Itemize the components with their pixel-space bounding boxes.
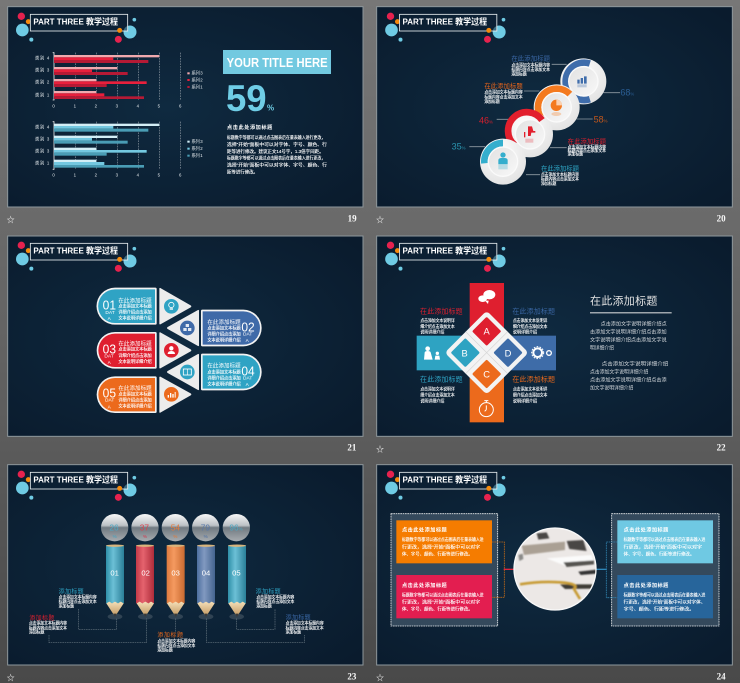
heading and underline bbox=[590, 294, 672, 313]
label red bbox=[568, 136, 607, 158]
label right blue: 添加标题 bbox=[286, 629, 302, 636]
slide 20 background bbox=[377, 7, 732, 207]
label orange: 在此添加标题 bbox=[484, 81, 523, 90]
label left cyan bbox=[59, 588, 97, 609]
label orange: 点击添加文本说明详 bbox=[513, 386, 548, 393]
body text: 明详细介绍 bbox=[590, 343, 614, 351]
label right cyan: 添加标题 bbox=[256, 588, 281, 596]
circle: 58% bbox=[534, 84, 580, 130]
pencil 04: 04 bbox=[202, 569, 211, 578]
header badge: PART THREE 教学过程 bbox=[402, 474, 487, 485]
pill 02: 详细介绍点击添加 bbox=[207, 330, 241, 337]
box: orange: 行更改，选择“开始”面板中可以对字 bbox=[402, 543, 481, 550]
label blue: 添加标题 bbox=[511, 71, 527, 78]
triangle icon 1 bbox=[159, 288, 191, 324]
slide 23: pencils bbox=[7, 465, 363, 683]
connector lines bbox=[469, 64, 620, 175]
triangle icon 2 bbox=[167, 310, 199, 346]
pill 04: 04 bbox=[241, 364, 255, 378]
box: orange: 标题数字等都可以通过点击图表后在量表输入进 bbox=[402, 536, 484, 543]
cross bars bbox=[417, 283, 556, 422]
label red bbox=[420, 306, 463, 336]
pill 03: 详细介绍点击添加 bbox=[118, 352, 152, 359]
box: light blue: 标题数字等都可以通过点击图表后在量表输入进 bbox=[624, 536, 706, 543]
label right blue: 添加标题 bbox=[286, 614, 311, 622]
pill 05: DAT bbox=[105, 398, 114, 404]
blue bar chart: 系列 2 bbox=[191, 145, 203, 152]
blue bar chart bbox=[35, 122, 203, 178]
label cyan: 在此添加标题 bbox=[541, 163, 580, 172]
pill 05: A bbox=[108, 404, 112, 409]
box: light blue: 体、字号、颜色、行距等进行修改。 bbox=[624, 550, 694, 557]
red bar chart: 系列 1 bbox=[191, 83, 203, 90]
pill 02: DAT bbox=[243, 332, 252, 338]
icon: gears bbox=[532, 347, 551, 359]
label orange: 点击添加文本标题内容 bbox=[484, 89, 523, 96]
triangle icon 5 bbox=[159, 377, 191, 413]
pill 03: 在此添加标题 bbox=[118, 340, 152, 348]
pill 01: DAT bbox=[105, 310, 115, 316]
header badge bbox=[16, 242, 136, 272]
pill 02: 02 bbox=[241, 321, 255, 335]
box: crimson bbox=[396, 575, 492, 618]
label blue bbox=[512, 306, 555, 336]
label cyan bbox=[420, 375, 463, 405]
pill 05: 文本说明详细介绍 bbox=[118, 403, 152, 410]
label orange bbox=[484, 81, 523, 105]
header badge bbox=[385, 13, 506, 43]
favorite star: ☆ bbox=[376, 674, 384, 683]
label center orange: 点击添加文本标题内容 bbox=[157, 637, 196, 644]
pill 05: 05 bbox=[103, 386, 116, 400]
label red: 在此添加标题 bbox=[568, 136, 607, 145]
pill 05: 点击添加文本标题 bbox=[118, 391, 152, 398]
body text: 点击添加文字说明详细介绍点击添 bbox=[590, 376, 667, 384]
body text bbox=[590, 320, 668, 392]
red bar chart: 6 bbox=[179, 104, 182, 109]
blue bar chart: 2 bbox=[95, 173, 98, 178]
favorite star: ☆ bbox=[376, 445, 384, 454]
label cyan: 细介绍点击添加文本 bbox=[420, 392, 455, 399]
pencil 04: % bbox=[204, 534, 208, 539]
blue bar chart: 3 bbox=[116, 173, 119, 178]
label red: 细介绍点击添加文本 bbox=[420, 323, 455, 330]
box: dark blue: 字号、颜色、行距等进行修改。 bbox=[624, 606, 694, 613]
box: crimson: 点击此处添加标题 bbox=[402, 581, 447, 589]
label orange: 在此添加标题 bbox=[512, 375, 555, 384]
label blue: 点击添加文本说明详 bbox=[513, 317, 548, 324]
text block: 选择“开始”面板中可以对字体、字号、颜色、行 bbox=[227, 141, 328, 148]
icon: chat bubbles bbox=[478, 290, 495, 304]
pill 01: A bbox=[108, 316, 112, 321]
pencil 02: 02 bbox=[141, 569, 150, 578]
label blue: 在此添加标题 bbox=[512, 306, 555, 315]
heading and underline: 在此添加标题 bbox=[590, 294, 657, 308]
box: light blue: 点击此处添加标题 bbox=[624, 525, 669, 533]
label cyan: 在此添加标题 bbox=[420, 375, 463, 384]
slide 19: bar charts and 59% bbox=[7, 7, 363, 225]
slide 22: cross diagram bbox=[376, 236, 732, 454]
label blue: 标题内容点击添加文本 bbox=[511, 66, 551, 73]
header badge: PART THREE 教学过程 bbox=[402, 245, 487, 256]
label red: 点击添加文本标题内容 bbox=[568, 143, 607, 150]
label right cyan: 标题内容点击添加文本 bbox=[256, 598, 295, 605]
connectors right bbox=[606, 542, 617, 598]
label blue bbox=[511, 54, 551, 78]
pill 01: 01 bbox=[103, 299, 116, 313]
circular photo bbox=[513, 527, 597, 612]
red bar chart: 类别 2 bbox=[35, 79, 50, 86]
box: orange: 体、字号、颜色、行距等进行修改。 bbox=[402, 550, 473, 557]
label red: 点击添加文本说明详 bbox=[420, 317, 455, 324]
page number: 22 bbox=[717, 443, 726, 453]
pill 03: DAT bbox=[104, 353, 114, 359]
pencil 02: 37 bbox=[140, 523, 149, 533]
slide 21: numbered pills bbox=[8, 236, 363, 453]
label cyan: 点击添加文本说明详 bbox=[420, 386, 455, 393]
right dashed panel bbox=[612, 514, 719, 626]
triangle icon 4 bbox=[167, 354, 199, 390]
pencil 03: % bbox=[173, 534, 177, 539]
label right cyan: 添加标题 bbox=[256, 602, 272, 609]
pencil 01: 01 bbox=[110, 569, 119, 578]
title box: YOUR TITLE HERE bbox=[227, 55, 328, 70]
box: light blue bbox=[617, 520, 713, 563]
label red: 标题内容点击添加文本 bbox=[568, 147, 607, 154]
central diamonds: D bbox=[505, 349, 512, 359]
big percentage: % bbox=[267, 104, 274, 113]
label blue: 说明详细介绍 bbox=[513, 329, 537, 336]
pill 04: 文本说明详细介绍 bbox=[207, 380, 241, 387]
red bar chart: 类别 1 bbox=[35, 92, 50, 99]
page number: 24 bbox=[717, 671, 726, 681]
percent 68: 68% bbox=[620, 88, 634, 98]
pencil 02 bbox=[131, 514, 159, 620]
box: light blue: 行更改，选择“开始”面板中可以对字 bbox=[624, 543, 703, 550]
pencil 05: 05 bbox=[232, 569, 241, 578]
text block bbox=[227, 123, 328, 175]
left dashed panel bbox=[391, 514, 498, 626]
red bar chart: 4 bbox=[137, 104, 140, 109]
pill 05: 在此添加标题 bbox=[118, 384, 152, 392]
red bar chart: 1 bbox=[74, 104, 77, 109]
pill 03: 点击添加文本标题 bbox=[118, 346, 152, 353]
page number: 20 bbox=[717, 213, 726, 223]
page number: 23 bbox=[347, 671, 357, 681]
label orange: 添加标题 bbox=[484, 98, 500, 105]
label orange bbox=[512, 375, 555, 405]
circle: 68% bbox=[560, 58, 606, 104]
text block: 距等进行修改。 bbox=[227, 168, 258, 175]
pencil 03: 03 bbox=[171, 569, 180, 578]
pill 03 bbox=[97, 332, 157, 369]
slide 20: progress circles bbox=[376, 7, 732, 225]
pill 04: 在此添加标题 bbox=[207, 362, 241, 370]
icon: people bbox=[424, 346, 440, 360]
slide 24 background bbox=[377, 465, 732, 665]
icon: stopwatch bbox=[479, 401, 493, 417]
pencil 04 bbox=[192, 514, 219, 620]
red bar chart: 系列 3 bbox=[191, 70, 203, 77]
favorite star: ☆ bbox=[7, 216, 15, 225]
header badge bbox=[385, 471, 506, 501]
label cyan: 说明详细介绍 bbox=[420, 398, 444, 405]
pill 02 bbox=[201, 310, 262, 346]
red bar chart: 2 bbox=[95, 104, 98, 109]
label center orange bbox=[157, 631, 196, 653]
label cyan: 添加标题 bbox=[541, 180, 557, 187]
page number: 19 bbox=[348, 213, 357, 223]
pencil 05 bbox=[223, 514, 250, 620]
connectors left bbox=[492, 542, 504, 597]
label center orange: 添加标题 bbox=[157, 646, 173, 653]
body text: 点击添加文字说明详细介绍 bbox=[590, 368, 648, 376]
blue bar chart: 系列 1 bbox=[191, 152, 203, 159]
label red: 添加标题 bbox=[568, 151, 584, 158]
label left red: 添加标题 bbox=[29, 629, 45, 636]
pencil 05: 96% bbox=[229, 523, 243, 533]
box: dark blue: 标题数字等都可以通过点击图表后在量表输入进 bbox=[624, 591, 706, 598]
big percentage: 59 bbox=[226, 77, 267, 119]
box: dark blue: 行更改，选择“开始”面板中可以对字体、 bbox=[624, 599, 705, 606]
text block: 标题数字等都可以通过点击图表后在量表输入进行更改， bbox=[227, 134, 325, 141]
label cyan: 点击添加文本标题内容 bbox=[541, 171, 580, 178]
blue bar chart: 类别 1 bbox=[35, 159, 50, 166]
pill 01: 文本说明详细介绍 bbox=[118, 314, 152, 321]
blue bar chart: 系列 3 bbox=[191, 138, 203, 145]
central diamonds: A bbox=[484, 326, 491, 336]
label right cyan: 点击添加文本标题内容 bbox=[256, 593, 295, 600]
label red: 说明详细介绍 bbox=[420, 329, 444, 336]
label center orange: 标题内容点击添加文本 bbox=[157, 642, 196, 649]
text block: 点击此处添加标题 bbox=[227, 123, 273, 131]
circle: 35% bbox=[480, 139, 526, 185]
label right blue bbox=[286, 614, 324, 636]
label left red: 标题内容点击添加文本 bbox=[29, 624, 68, 631]
pencil 04: 79 bbox=[201, 523, 210, 533]
percent 35: 35% bbox=[452, 142, 466, 152]
label blue: 在此添加标题 bbox=[511, 54, 551, 63]
title box bbox=[223, 50, 331, 74]
red bar chart: 0 bbox=[52, 104, 55, 109]
body text: 击添加文字说明详细介绍点击添加 bbox=[590, 328, 667, 336]
central diamonds bbox=[445, 311, 529, 395]
label blue: 细介绍点击添加文本 bbox=[513, 323, 548, 330]
label orange: 标题内容点击添加文本 bbox=[484, 93, 523, 100]
text block: 选择“开始”面板中可以对字体、字号、颜色、行 bbox=[227, 162, 328, 169]
blue bar chart: 5 bbox=[158, 173, 161, 178]
blue bar chart: 6 bbox=[179, 173, 182, 178]
pill 03: 文本说明详细介绍 bbox=[118, 358, 152, 365]
text block: 标题数字等都可以通过点击图表后在量表输入进行更改， bbox=[227, 155, 325, 162]
pill 04: 点击添加文本标题 bbox=[207, 368, 241, 375]
slide 24: photo with four text boxes bbox=[376, 465, 732, 683]
pill 04: A bbox=[246, 382, 250, 387]
pencil 02: % bbox=[143, 534, 147, 539]
box: orange bbox=[396, 520, 492, 563]
label orange: 细介绍点击添加文本 bbox=[513, 392, 548, 399]
dashed connectors bbox=[49, 609, 304, 643]
label right blue: 点击添加文本标题内容 bbox=[286, 620, 324, 627]
slide 19 background bbox=[8, 7, 363, 207]
box: crimson: 体、字号、颜色、行距等进行修改。 bbox=[402, 606, 473, 613]
pill 01: 详细介绍点击添加 bbox=[118, 308, 152, 315]
label right blue: 标题内容点击添加文本 bbox=[286, 624, 324, 631]
label cyan bbox=[541, 163, 580, 187]
red bar chart bbox=[35, 53, 203, 109]
pill 01 bbox=[96, 288, 157, 325]
red bar chart: 类别 4 bbox=[35, 55, 50, 62]
percent 58: 58% bbox=[594, 114, 608, 124]
pencil 01: % bbox=[113, 534, 117, 539]
box: crimson: 标题数字等都可以通过点击图表后在量表输入进 bbox=[402, 591, 484, 598]
body text: 文字说明详细介绍点击添加文字说 bbox=[590, 336, 667, 344]
label center orange: 添加标题 bbox=[157, 631, 183, 639]
pill 04: DAT bbox=[243, 376, 252, 382]
body text: 点击添加文字说明详细介绍 bbox=[602, 360, 668, 368]
favorite star: ☆ bbox=[7, 674, 15, 683]
pill 02: 文本说明详细介绍 bbox=[207, 336, 241, 343]
label cyan: 标题内容点击添加文本 bbox=[541, 176, 580, 183]
pill 01: 点击添加文本标题 bbox=[118, 302, 152, 309]
box: crimson: 行更改，选择“开始”面板中可以对字 bbox=[402, 599, 481, 606]
slide 23 background bbox=[8, 465, 363, 665]
pill 04 bbox=[201, 354, 262, 390]
pill 03: 03 bbox=[103, 342, 116, 356]
header badge bbox=[16, 471, 136, 501]
pill 02: 点击添加文本标题 bbox=[207, 324, 241, 331]
red bar chart: 类别 3 bbox=[35, 67, 50, 74]
percent 46: 46% bbox=[479, 115, 493, 125]
central diamonds: B bbox=[462, 349, 468, 359]
red bar chart: 系列 2 bbox=[191, 76, 203, 83]
header badge bbox=[16, 13, 136, 43]
pencil 01: 26 bbox=[109, 523, 119, 533]
label orange: 说明详细介绍 bbox=[513, 398, 537, 405]
pill 02: A bbox=[246, 338, 250, 343]
connector blue stub bbox=[594, 569, 607, 570]
pill 04: 详细介绍点击添加 bbox=[207, 374, 241, 381]
body text: 点击添加文字说明详细介绍点 bbox=[601, 320, 667, 328]
header badge: PART THREE 教学过程 bbox=[33, 474, 118, 485]
red bar chart: 3 bbox=[116, 104, 119, 109]
pill 05: 详细介绍点击添加 bbox=[118, 397, 152, 404]
blue bar chart: 0 bbox=[52, 173, 55, 178]
triangle icon 3 bbox=[159, 332, 191, 368]
pencil 03 bbox=[162, 514, 189, 620]
slide 21 background bbox=[8, 236, 363, 436]
blue bar chart: 类别 3 bbox=[35, 135, 50, 142]
central diamonds: C bbox=[483, 370, 490, 380]
red bar chart: 5 bbox=[158, 104, 161, 109]
pencil 03: 54 bbox=[171, 523, 180, 533]
header badge: PART THREE 教学过程 bbox=[33, 16, 118, 27]
label left red: 添加标题 bbox=[29, 614, 54, 622]
pill 01: 在此添加标题 bbox=[118, 296, 152, 304]
header badge: PART THREE 教学过程 bbox=[402, 16, 487, 27]
pencil 01 bbox=[101, 514, 128, 620]
pill 03: A bbox=[108, 360, 112, 365]
label right cyan bbox=[256, 588, 295, 609]
body text: 加文字说明详细介绍 bbox=[590, 384, 633, 392]
label left cyan: 标题内容点击添加文本 bbox=[59, 598, 97, 605]
label left cyan: 点击添加文本标题内容 bbox=[59, 593, 97, 600]
label left red bbox=[29, 614, 68, 636]
label red: 在此添加标题 bbox=[420, 306, 463, 315]
pill 05 bbox=[97, 376, 157, 413]
label left cyan: 添加标题 bbox=[59, 588, 84, 596]
label left cyan: 添加标题 bbox=[59, 602, 75, 609]
header badge: PART THREE 教学过程 bbox=[33, 245, 118, 256]
box: dark blue bbox=[617, 575, 713, 618]
favorite star: ☆ bbox=[376, 216, 384, 225]
box: orange: 点击此处添加标题 bbox=[402, 525, 447, 533]
blue bar chart: 4 bbox=[137, 173, 140, 178]
label left red: 点击添加文本标题内容 bbox=[29, 620, 68, 627]
text block: 距等进行修改。建议正文14号字，1.3倍字间距。 bbox=[227, 148, 324, 155]
label blue: 点击添加文本标题内容 bbox=[511, 61, 551, 68]
page number: 21 bbox=[347, 443, 357, 453]
blue bar chart: 类别 3 bbox=[35, 147, 50, 154]
box: dark blue: 点击此处添加标题 bbox=[624, 581, 669, 589]
connector red stub bbox=[504, 569, 516, 570]
pill 02: 在此添加标题 bbox=[207, 318, 241, 326]
header badge bbox=[385, 242, 506, 272]
circle: 46% bbox=[507, 111, 553, 157]
slide 22 background bbox=[377, 236, 732, 436]
blue bar chart: 类别 4 bbox=[35, 123, 50, 130]
blue bar chart: 1 bbox=[74, 173, 77, 178]
